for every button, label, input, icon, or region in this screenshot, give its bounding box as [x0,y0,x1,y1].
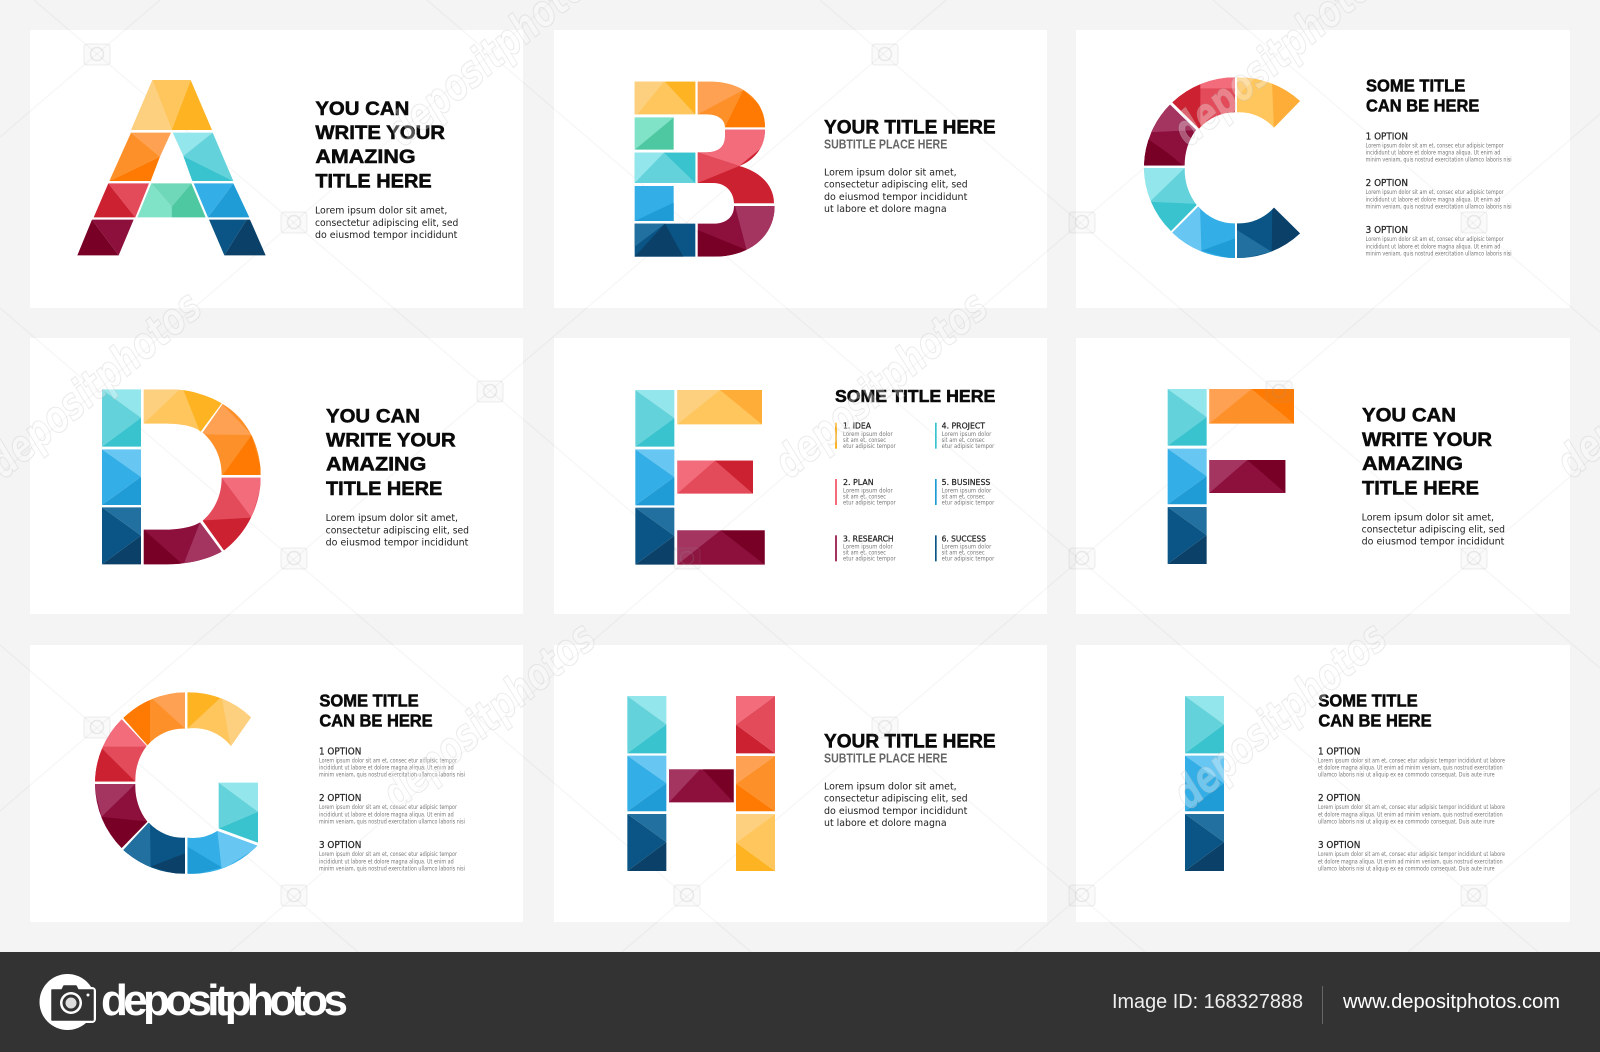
image id: Image ID: 168327888 [1112,991,1303,1013]
item 6 success: Lorem ipsum dolor [942,544,992,551]
title [1362,406,1492,499]
item 5 business: etur adipisic tempor [942,499,995,506]
option 2 [319,793,465,825]
item 3 research: 3. RESEARCH [843,533,894,543]
item 3 research: Lorem ipsum dolor [843,544,893,551]
letter I graphic [1185,696,1224,871]
body text: consectetur adipiscing elit, sed [326,525,469,536]
body text: do eiusmod tempor incididunt [824,806,967,817]
option 3: minim veniam, quis nostrud exercitation ullamco laboris nisi [1366,250,1512,257]
option 2: 2 OPTION [1318,793,1360,804]
item 4 project: 4. PROJECT [942,421,986,431]
item 4 project [935,421,995,450]
option 3: incididunt ut labore et dolore magna aliqua. Ut enim ad [1366,243,1500,250]
item 1 idea: Lorem ipsum dolor [843,431,893,438]
letter B graphic [550,30,1050,310]
option 2: minim veniam, quis nostrud exercitation ullamco laboris nisi [319,818,465,825]
option 1 [1318,746,1505,779]
option 2 [1366,178,1512,210]
option 3: incididunt ut labore et dolore magna aliqua. Ut enim ad [319,858,454,865]
title: YOU CAN [1362,406,1456,427]
option 3: ullamco laboris nisi ut aliquip ex ea commodo consequat. Duis aute irure [1318,865,1495,872]
title: YOUR TITLE HERE [824,732,996,753]
title: WRITE YOUR [326,431,456,452]
item 3 research [835,533,896,563]
title: WRITE YOUR [315,123,445,144]
option 3: Lorem ipsum dolor sit am et, consec etur adipisic tempor incididunt ut labore [1318,851,1505,858]
option 2 [1318,793,1505,825]
title: TITLE HERE [315,171,432,192]
body text [824,782,968,829]
option 1: minim veniam, quis nostrud exercitation ullamco laboris nisi [1366,157,1512,164]
title: SOME TITLE [1318,691,1418,711]
watermark text [0,0,1600,819]
title [315,99,445,192]
body text: Lorem ipsum dolor sit amet, [1362,512,1494,523]
option 2: 2 OPTION [319,793,361,804]
title [1318,691,1432,730]
body text: do eiusmod tempor incididunt [315,230,457,241]
item 6 success: sit am et, consec [942,550,985,557]
option 2: Lorem ipsum dolor sit am et, consec etur adipisic tempor [319,804,457,811]
body text: consectetur adipiscing elit, sed [1362,524,1505,535]
option 2: et dolore magna aliqua. Ut enim ad minim veniam, quis nostrud exercitation [1318,811,1503,818]
option 2: incididunt ut labore et dolore magna aliqua. Ut enim ad [1366,196,1500,203]
item 6 success: etur adipisic tempor [942,556,995,563]
body text: ut labore et dolore magna [824,818,947,829]
body text: Lorem ipsum dolor sit amet, [824,168,957,179]
letter A graphic [77,80,266,255]
item 1 idea: 1. IDEA [843,421,871,431]
title: TITLE HERE [1362,478,1479,499]
body text: do eiusmod tempor incididunt [824,192,967,203]
title: CAN BE HERE [1366,95,1479,115]
letter H graphic [627,696,775,871]
item 5 business: 5. BUSINESS [942,477,990,487]
option 3: 3 OPTION [319,840,361,851]
letter C graphic [1144,77,1300,258]
option 1: Lorem ipsum dolor sit am et, consec etur adipisic tempor incididunt ut labore [1318,757,1505,764]
body text: Lorem ipsum dolor sit amet, [824,782,957,793]
body text: consectetur adipiscing elit, sed [824,794,968,805]
body text [824,168,968,215]
item 2 plan [835,477,896,506]
option 1: 1 OPTION [1318,746,1360,757]
letter G graphic [95,692,258,874]
body text: do eiusmod tempor incididunt [1362,536,1504,547]
option 2: incididunt ut labore et dolore magna aliqua. Ut enim ad [319,811,454,818]
item 6 success [935,533,995,563]
title: SOME TITLE [319,691,419,711]
option 3: Lorem ipsum dolor sit am et, consec etur adipisic tempor [1366,236,1504,243]
option 2: minim veniam, quis nostrud exercitation ullamco laboris nisi [1366,203,1512,210]
footer logo icon [40,974,96,1030]
site url: www.depositphotos.com [1342,991,1560,1013]
panel: letter C [1075,30,1575,310]
item 4 project: Lorem ipsum dolor [942,431,992,438]
body text: Lorem ipsum dolor sit amet, [326,513,458,524]
item 2 plan: sit am et, consec [843,493,886,500]
body text: Lorem ipsum dolor sit amet, [315,206,447,217]
panel: letter G [95,654,584,874]
option 2: 2 OPTION [1366,178,1408,189]
item 3 research: etur adipisic tempor [843,556,896,563]
letter E graphic [635,390,765,565]
item 1 idea: etur adipisic tempor [843,443,896,450]
subtitle: SUBTITLE PLACE HERE [824,752,947,766]
option 1: Lorem ipsum dolor sit am et, consec etur adipisic tempor [1366,142,1504,149]
title: YOU CAN [315,99,409,120]
title: TITLE HERE [326,479,442,500]
panel: letter F [1168,389,1505,564]
letter D graphic [30,335,530,615]
panel: letter B [550,30,1050,310]
body text: do eiusmod tempor incididunt [326,537,468,548]
item 1 idea: sit am et, consec [843,437,886,444]
item 6 success: 6. SUCCESS [942,533,986,543]
title: AMAZING [326,455,426,476]
item 5 business: Lorem ipsum dolor [942,487,992,494]
watermark text: depositphotos [372,612,606,819]
footer bar [0,952,1600,1052]
title [326,406,456,500]
option 3: Lorem ipsum dolor sit am et, consec etur adipisic tempor [319,851,457,858]
item 4 project: etur adipisic tempor [942,443,995,450]
body text [315,206,458,241]
item 2 plan: etur adipisic tempor [843,499,896,506]
option 1 [1366,131,1512,164]
title: AMAZING [315,147,416,168]
watermark text: depositphotos [764,281,998,488]
option 3: 3 OPTION [1318,840,1360,851]
title: SOME TITLE HERE [835,386,995,406]
option 1: incididunt ut labore et dolore magna aliqua. Ut enim ad [1366,150,1500,157]
panel: letter E [635,386,995,565]
title [1366,76,1479,115]
option 2: Lorem ipsum dolor sit am et, consec etur adipisic tempor incididunt ut labore [1318,804,1505,811]
title: CAN BE HERE [1318,710,1432,730]
title [319,691,433,730]
body text: consectetur adipiscing elit, sed [824,180,968,191]
title: AMAZING [1362,454,1463,475]
option 3 [1366,225,1512,257]
option 1 [319,746,465,779]
body text: consectetur adipiscing elit, sed [315,218,458,229]
footer logo wordmark: depositphotos [101,976,348,1025]
option 1: 1 OPTION [319,746,361,757]
watermark cameras [84,44,1487,906]
body text [326,513,469,548]
option 1: 1 OPTION [1366,131,1408,142]
option 3: 3 OPTION [1366,225,1408,236]
option 2: ullamco laboris nisi ut aliquip ex ea commodo consequat. Duis aute irure [1318,818,1495,825]
watermark text: depositphotos [1163,612,1397,819]
option 2: Lorem ipsum dolor sit am et, consec etur adipisic tempor [1366,189,1504,196]
body text [1362,512,1505,547]
option 1: minim veniam, quis nostrud exercitation ullamco laboris nisi [319,772,465,779]
option 3 [1318,840,1505,872]
option 3: minim veniam, quis nostrud exercitation ullamco laboris nisi [319,865,465,872]
item 2 plan: Lorem ipsum dolor [843,487,893,494]
option 1: et dolore magna aliqua. Ut enim ad minim veniam, quis nostrud exercitation [1318,765,1503,772]
item 1 idea [835,421,896,450]
item 2 plan: 2. PLAN [843,477,874,487]
option 1: ullamco laboris nisi ut aliquip ex ea commodo consequat. Duis aute irure [1318,772,1495,779]
title: YOUR TITLE HERE [824,117,996,138]
option 3 [319,840,465,872]
item 4 project: sit am et, consec [942,437,985,444]
title: YOU CAN [326,406,420,427]
option 3: et dolore magna aliqua. Ut enim ad minim veniam, quis nostrud exercitation [1318,858,1503,865]
body text: ut labore et dolore magna [824,204,947,215]
option 1: Lorem ipsum dolor sit am et, consec etur adipisic tempor [319,757,457,764]
item 3 research: sit am et, consec [843,550,886,557]
panel: letter I [1185,691,1505,872]
panel: letter H [627,696,996,871]
option 1: incididunt ut labore et dolore magna aliqua. Ut enim ad [319,765,454,772]
subtitle: SUBTITLE PLACE HERE [824,137,947,151]
title: SOME TITLE [1366,76,1465,96]
panel: letter D [30,335,530,615]
letter F graphic [1168,389,1294,564]
title: WRITE YOUR [1362,430,1492,451]
title: CAN BE HERE [319,710,433,730]
item 5 business: sit am et, consec [942,493,985,500]
item 5 business [935,477,995,506]
panel: letter A [77,80,458,255]
